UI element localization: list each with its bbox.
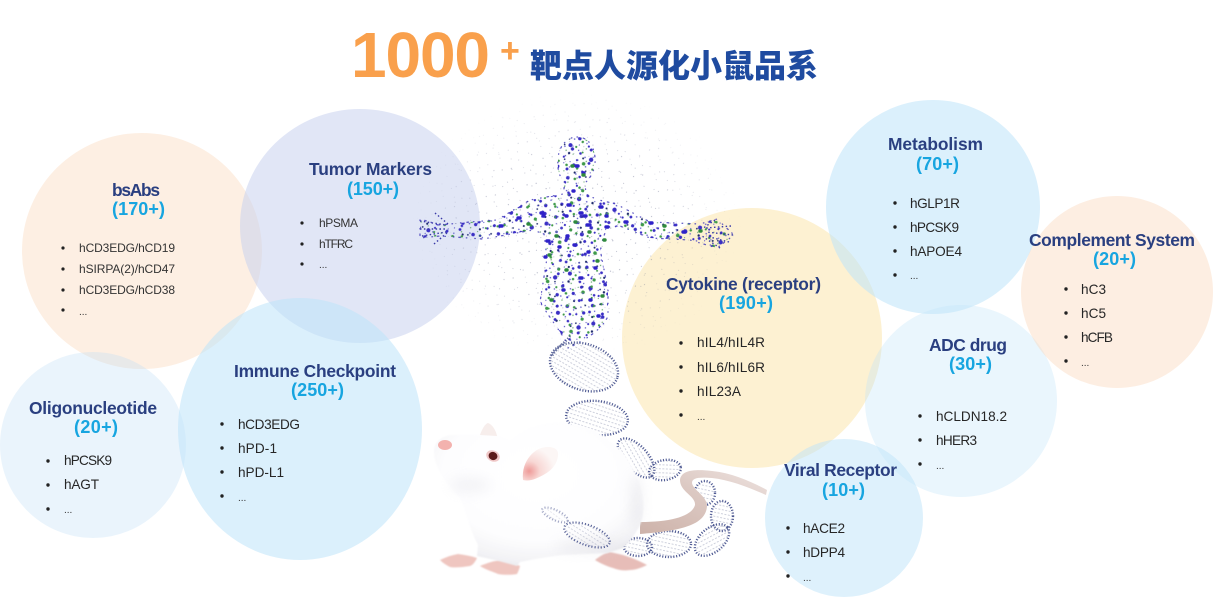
panel: Complement System: hC3 xyxy=(1081,282,1106,297)
panel: Oligonucleotide: hPCSK9 xyxy=(64,453,112,468)
panel: Complement System: hC5 xyxy=(1081,306,1106,321)
icon: front paws xyxy=(440,554,520,575)
panel: Metabolism: ... xyxy=(910,271,918,282)
panel: Oligonucleotide xyxy=(0,352,186,538)
panel: ADC drug: ... xyxy=(936,461,944,472)
panel: Immune Checkpoint: (250+) xyxy=(291,380,344,400)
title xyxy=(351,19,818,91)
panel: Complement System: (20+) xyxy=(1093,249,1136,269)
panel: bsAbs: ... xyxy=(79,307,87,318)
icon: body xyxy=(434,423,643,566)
illustration: white mouse xyxy=(434,423,767,575)
panel: Tumor Markers: Tumor Markers xyxy=(309,159,432,179)
panel: Metabolism: Metabolism xyxy=(888,134,983,154)
icon: nose xyxy=(438,440,452,450)
panel: Viral Receptor: (10+) xyxy=(822,480,865,500)
panel: Tumor Markers: hPSMA xyxy=(319,216,358,230)
panel: bsAbs: hSIRPA(2)/hCD47 xyxy=(79,262,175,276)
panel: Immune Checkpoint xyxy=(178,298,422,560)
panel: Cytokine (receptor): ... xyxy=(697,412,705,423)
icon: ear xyxy=(523,447,558,481)
panel: Tumor Markers xyxy=(240,109,480,343)
panel: Metabolism: (70+) xyxy=(916,154,959,174)
title: 靶点人源化小鼠品系 xyxy=(530,41,818,87)
panel: Cytokine (receptor): Cytokine (receptor) xyxy=(666,274,821,294)
panel: Viral Receptor: hACE2 xyxy=(803,521,845,536)
panel: Complement System: ... xyxy=(1081,358,1089,369)
panel: ADC drug: ADC drug xyxy=(929,335,1007,355)
panel: Oligonucleotide: hAGT xyxy=(64,477,99,492)
illustration: DNA helix xyxy=(544,334,735,562)
panel: ADC drug: hCLDN18.2 xyxy=(936,409,1007,424)
panel: Immune Checkpoint: hCD3EDG xyxy=(238,417,300,432)
panel: Cytokine (receptor) xyxy=(622,208,882,468)
panel: Immune Checkpoint: hPD-L1 xyxy=(238,465,284,480)
title: 1000 xyxy=(351,19,490,91)
panel: Viral Receptor: hDPP4 xyxy=(803,545,845,560)
panel: Complement System xyxy=(1021,196,1213,388)
panel: Metabolism: hPCSK9 xyxy=(910,220,959,235)
panel: Metabolism: hGLP1R xyxy=(910,196,960,211)
panel: Oligonucleotide: ... xyxy=(64,505,72,516)
panel: Immune Checkpoint: Immune Checkpoint xyxy=(234,361,396,381)
fur shading xyxy=(450,474,641,551)
icon: eye xyxy=(484,448,502,464)
panel: Tumor Markers: ... xyxy=(319,260,327,271)
panel: Tumor Markers: (150+) xyxy=(347,179,399,199)
panel: Viral Receptor: ... xyxy=(803,573,811,584)
panel: Cytokine (receptor): hIL4/hIL4R xyxy=(697,335,765,350)
panel: Cytokine (receptor): (190+) xyxy=(719,293,773,313)
panel: Immune Checkpoint: ... xyxy=(238,493,246,504)
panel: Immune Checkpoint: hPD-1 xyxy=(238,441,277,456)
panel: Oligonucleotide: (20+) xyxy=(74,417,118,437)
panel: Oligonucleotide: Oligonucleotide xyxy=(29,398,157,418)
panel: Complement System: Complement System xyxy=(1029,230,1195,250)
DNA through the mouse xyxy=(540,505,613,553)
panel: ADC drug xyxy=(865,305,1057,497)
panel: bsAbs: hCD3EDG/hCD38 xyxy=(79,283,175,297)
icon: tail xyxy=(640,470,767,534)
larger particles xyxy=(500,166,685,316)
panel: ADC drug: hHER3 xyxy=(936,433,977,448)
illustration: particle human figure xyxy=(419,100,734,349)
panel: bsAbs xyxy=(22,133,262,369)
title: + xyxy=(500,32,520,70)
hands xyxy=(420,213,733,248)
panel: ADC drug: (30+) xyxy=(949,354,992,374)
panel: bsAbs: (170+) xyxy=(112,199,165,219)
panel: Metabolism xyxy=(826,100,1040,314)
panel: bsAbs: hCD3EDG/hCD19 xyxy=(79,241,175,255)
panel: Viral Receptor xyxy=(765,439,923,597)
panel: Cytokine (receptor): hIL6/hIL6R xyxy=(697,360,765,375)
icon: small far ear xyxy=(480,423,497,436)
panel: Complement System: hCFB xyxy=(1081,330,1113,345)
panel: Tumor Markers: hTFRC xyxy=(319,237,353,251)
panel: Cytokine (receptor): hIL23A xyxy=(697,384,742,399)
icon: back foot xyxy=(595,552,647,570)
panel: Metabolism: hAPOE4 xyxy=(910,244,962,259)
panel: bsAbs: bsAbs xyxy=(112,180,160,200)
panel: Viral Receptor: Viral Receptor xyxy=(784,460,897,480)
